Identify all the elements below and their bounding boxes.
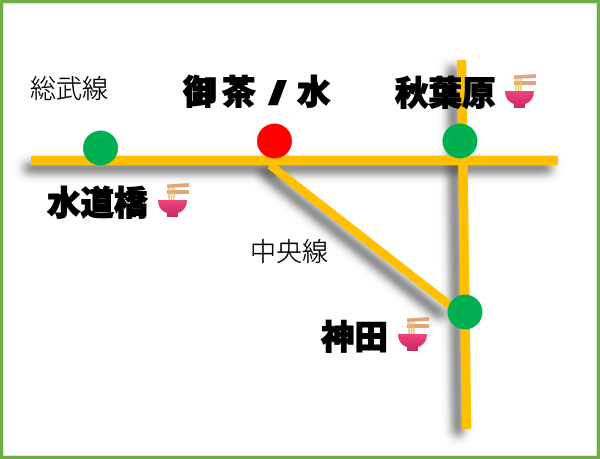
station label: Ochanomizu: 水: [297, 75, 330, 112]
Sobu line: [31, 156, 558, 165]
railway lines: [31, 60, 558, 429]
station: Ochanomizu: [257, 124, 292, 158]
station label: Ochanomizu: /: [268, 75, 286, 111]
line label: Sobu: 総武線: [30, 74, 108, 104]
line label: Chuo: 中央線: [250, 237, 328, 267]
station label: Suidobashi: 水道橋: [47, 186, 148, 223]
station label: Kanda: 神田: [321, 320, 388, 357]
station label: Akihabara: 秋葉原: [395, 76, 496, 113]
Chuo line: [270, 165, 452, 307]
station: Akihabara: [442, 124, 478, 158]
station: Suidobashi: [83, 130, 118, 166]
icon: ramen bowl Suidobashi: [158, 183, 189, 217]
station: Kanda: [448, 294, 482, 330]
icon: ramen bowl Kanda: [398, 317, 429, 351]
Akihabara vertical line: [462, 60, 466, 429]
station label: Ochanomizu: [183, 75, 330, 112]
station label: Ochanomizu: 茶: [222, 75, 256, 112]
icon: ramen bowl Akihabara: [505, 74, 536, 108]
station label: Ochanomizu: 御: [183, 75, 216, 112]
line shadows: [24, 66, 552, 436]
